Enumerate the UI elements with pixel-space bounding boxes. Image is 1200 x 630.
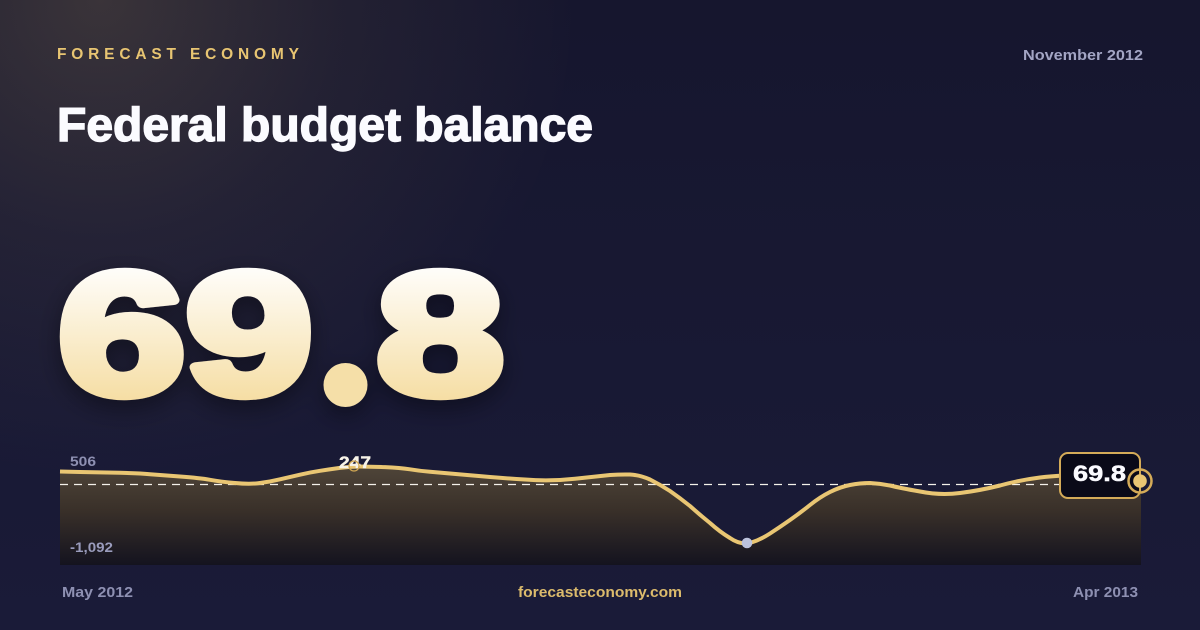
current value badge: 69.8 [1073, 461, 1126, 486]
peak value label: 247 [339, 453, 371, 472]
start date: May 2012 [62, 584, 133, 601]
current point marker [1128, 470, 1152, 492]
chart line [60, 466, 1140, 543]
axis max label: 506 [70, 453, 96, 469]
title: Federal budget balance [57, 98, 593, 151]
sparkline chart [60, 453, 1152, 565]
axis min label: -1,092 [70, 539, 113, 555]
end date: Apr 2013 [1073, 584, 1138, 601]
peak marker [349, 461, 359, 471]
hero value: 69 .8 [58, 236, 504, 430]
reference dashed line [60, 484, 1062, 486]
date label: November 2012 [1023, 47, 1143, 64]
chart area fill [60, 466, 1141, 565]
website: forecasteconomy.com [518, 584, 682, 601]
low point marker [742, 538, 752, 548]
current value badge [1060, 453, 1140, 498]
brand label: FORECAST ECONOMY [57, 46, 300, 63]
